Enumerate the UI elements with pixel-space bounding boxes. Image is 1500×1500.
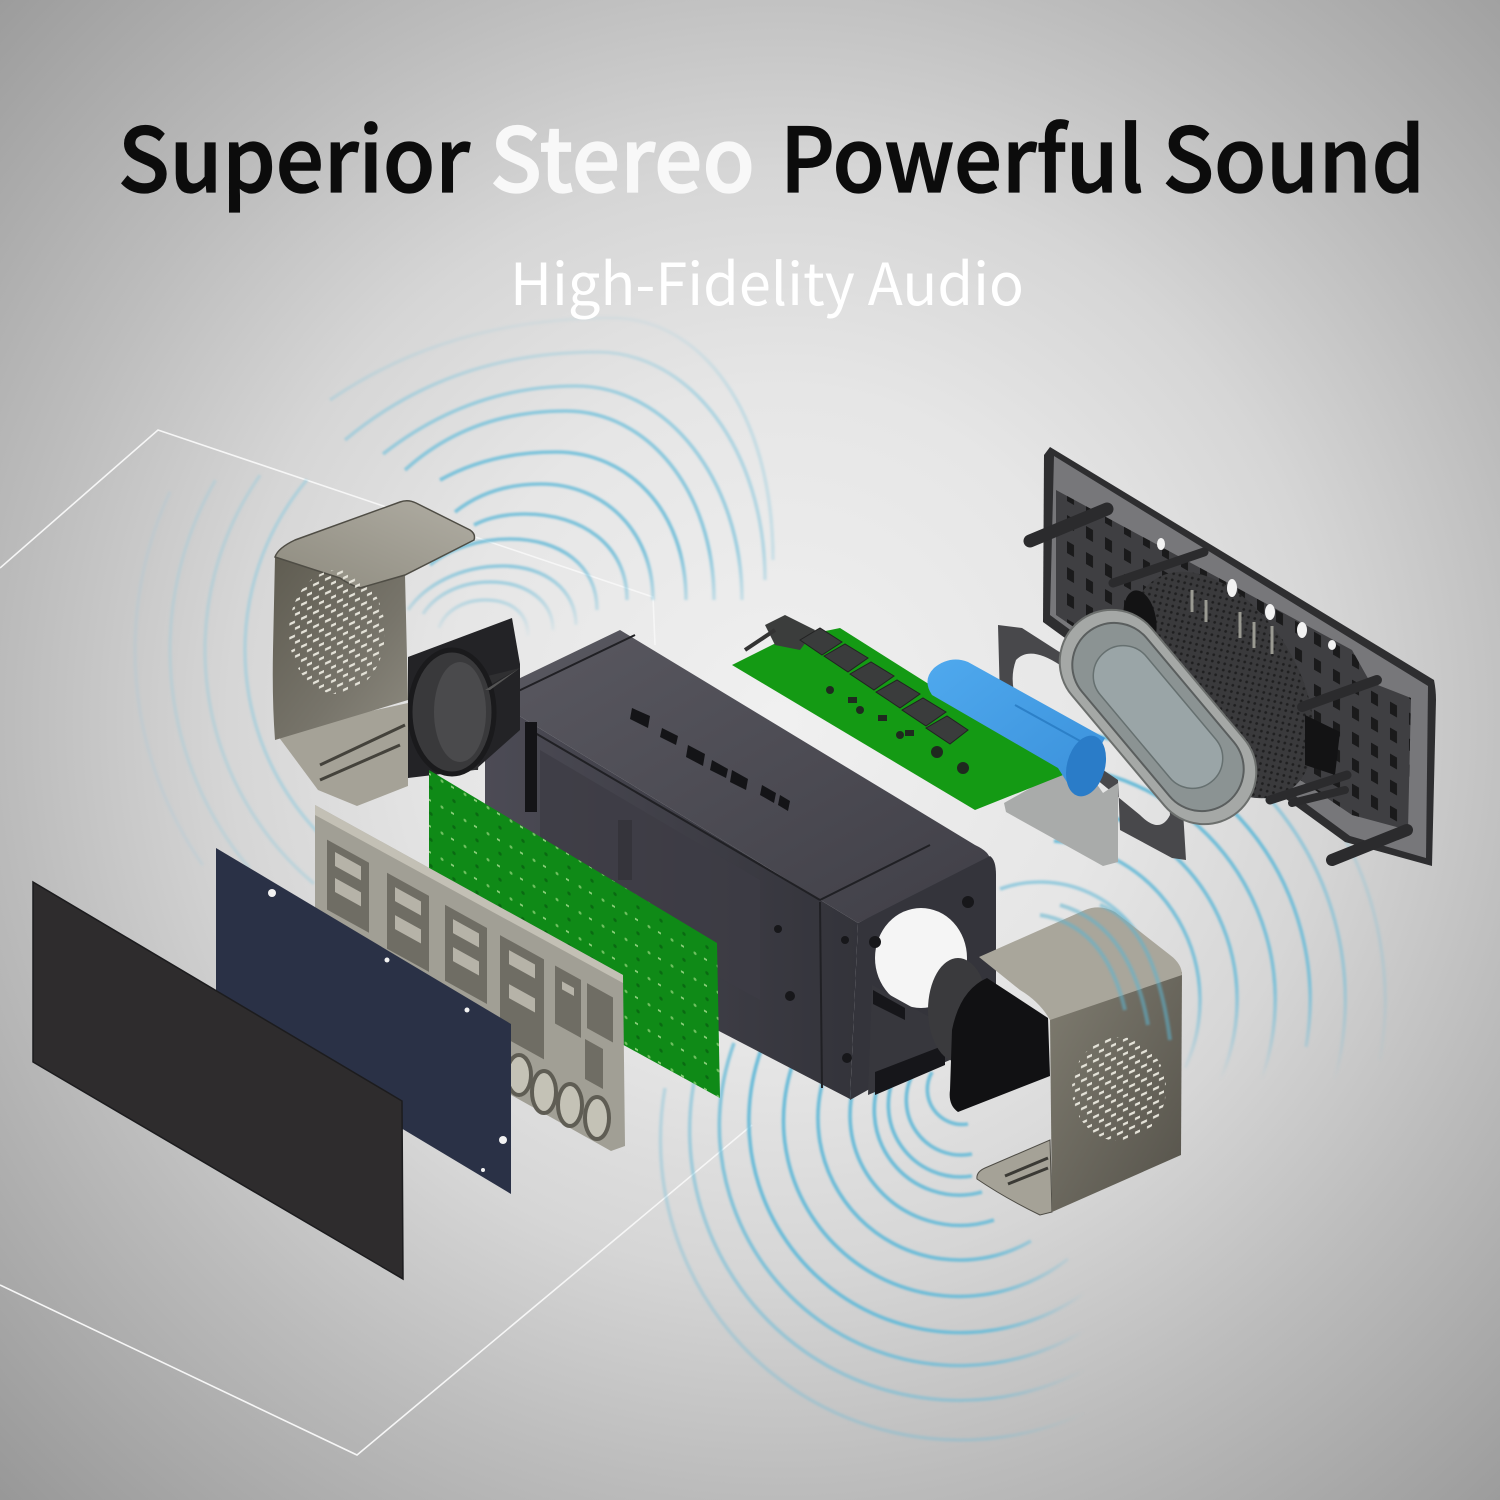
subtitle: High-Fidelity Audio (510, 238, 1024, 322)
board chips (800, 628, 968, 744)
main cabinet (485, 630, 996, 1100)
mounting posts (1030, 509, 1407, 860)
title: Powerful Sound (780, 89, 1425, 218)
panel windows (327, 840, 613, 1097)
sound waves: right passive radiator (1000, 730, 1385, 1117)
right speaker cover (977, 907, 1182, 1215)
navy panel (216, 848, 511, 1194)
screws (774, 896, 974, 1063)
sound waves over right cover (1040, 905, 1170, 1040)
seam lines (510, 635, 930, 1088)
title (118, 89, 1425, 218)
plate holes (1157, 538, 1336, 650)
battery (927, 660, 1112, 801)
large circuit board (429, 770, 720, 1098)
cabinet side (485, 695, 858, 1099)
board components (826, 686, 969, 774)
sound waves: lower right speaker (660, 1043, 1108, 1440)
grey inner panel (315, 805, 625, 1151)
top buttons (630, 708, 790, 811)
cabinet end (850, 856, 996, 1100)
sound waves: upper left speaker (330, 318, 773, 636)
cover lower tray (275, 703, 408, 806)
black front panel (33, 882, 403, 1279)
right housing plate (1030, 447, 1436, 866)
left driver (408, 618, 520, 778)
left speaker cover (273, 501, 474, 806)
plate cut-outs (1119, 588, 1340, 775)
cabinet top (485, 630, 990, 923)
side recess (540, 750, 760, 1000)
speaker mount ring (998, 625, 1186, 860)
title: Stereo (490, 89, 755, 218)
passive radiator (1038, 589, 1278, 845)
right speaker driver (928, 958, 1050, 1112)
right cover flap (979, 907, 1182, 1020)
cover flap (275, 501, 474, 588)
ports (1192, 590, 1272, 654)
platform outline (0, 430, 752, 1455)
translucent block (1004, 760, 1118, 866)
central mesh grille (1092, 539, 1352, 831)
small circuit board (732, 615, 1068, 810)
round buttons (507, 1055, 609, 1139)
right cover tray (977, 1140, 1052, 1215)
connector (765, 615, 815, 650)
title: Superior (118, 89, 471, 218)
cover perforated grille (289, 570, 385, 694)
cover panel (273, 557, 408, 740)
right cover panel (1050, 972, 1182, 1212)
end face opening (875, 908, 967, 1008)
sound waves: far left arcs (0, 128, 1032, 1172)
cabinet dark slots (525, 722, 632, 880)
right cover perforated grille (1072, 1037, 1166, 1141)
